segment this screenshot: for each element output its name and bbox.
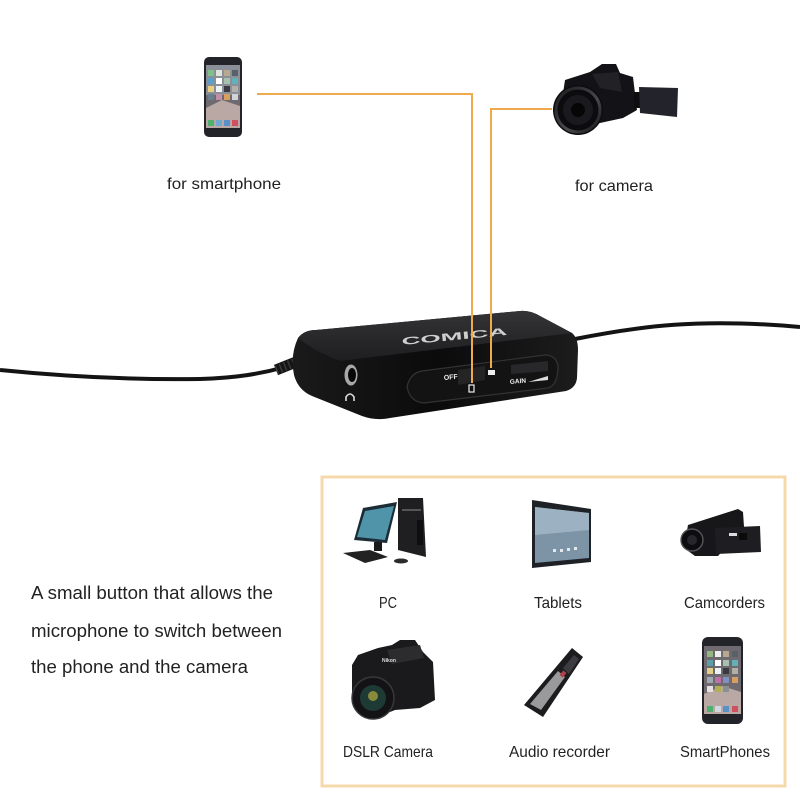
phone symbol bbox=[469, 385, 474, 392]
label: SmartPhones: SmartPhones bbox=[680, 744, 770, 761]
camera symbol bbox=[488, 370, 495, 375]
brand text: COMICA bbox=[401, 326, 509, 348]
text block: switch description bbox=[31, 583, 282, 677]
device body bbox=[293, 311, 578, 419]
label: DSLR Camera: DSLR Camera bbox=[343, 744, 433, 761]
text block: switch description: the phone and the camera bbox=[31, 657, 249, 677]
icon: smartphone top bbox=[204, 57, 242, 137]
icon: camera top with flip screen bbox=[553, 64, 678, 135]
control panel bbox=[407, 355, 558, 403]
headphone symbol bbox=[346, 394, 354, 401]
label: for camera: for camera bbox=[575, 178, 653, 195]
top face bbox=[298, 311, 572, 361]
gain wheel bbox=[511, 361, 548, 374]
label: Camcorders: Camcorders bbox=[684, 595, 765, 612]
label: OFF: OFF bbox=[444, 374, 459, 382]
cable: right bbox=[575, 323, 800, 339]
label: Audio recorder: Audio recorder bbox=[509, 744, 611, 761]
slide switch bbox=[458, 366, 485, 385]
headphone jack bbox=[344, 364, 358, 386]
label: Tablets: Tablets bbox=[534, 595, 582, 612]
icon: smartphone bottom bbox=[702, 637, 743, 724]
icon: tablet bbox=[532, 500, 591, 568]
arrow: smartphone connector line bbox=[257, 94, 472, 383]
arrow: camera connector line bbox=[491, 109, 552, 368]
icon: audio recorder bbox=[524, 648, 583, 717]
icon: DSLR camera bbox=[352, 640, 435, 719]
label: GAIN: GAIN bbox=[510, 378, 527, 386]
text block: switch description: microphone to switch between bbox=[31, 621, 282, 641]
cable: left bbox=[0, 367, 285, 379]
icon: desktop PC bbox=[343, 498, 426, 564]
gain wedge bbox=[528, 376, 548, 382]
label: for smartphone: for smartphone bbox=[167, 176, 281, 193]
icon: camcorder bbox=[681, 509, 761, 556]
icon: DSLR camera: Nikon bbox=[382, 658, 396, 664]
strain relief bbox=[276, 358, 306, 370]
switch device bbox=[276, 311, 578, 419]
text block: switch description: A small button that allows the bbox=[31, 583, 273, 603]
panel: compatible devices bbox=[322, 477, 785, 786]
label: PC: PC bbox=[379, 595, 397, 612]
